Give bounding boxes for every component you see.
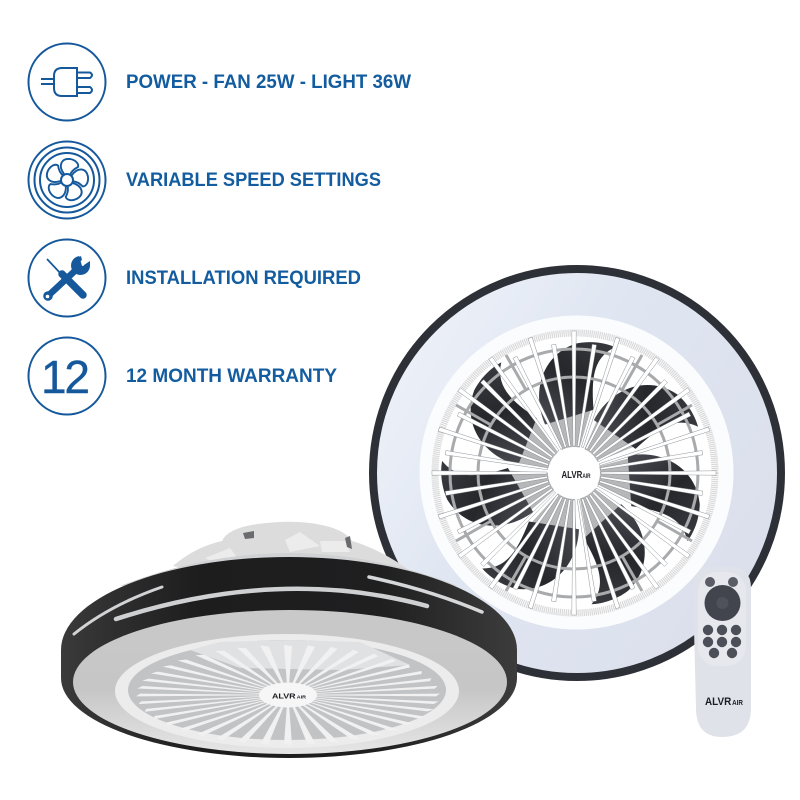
remote body (693, 567, 751, 737)
rear cage glimpses (190, 640, 410, 670)
hub with logo: ALVR AIR (272, 692, 307, 700)
inner recess (128, 640, 446, 740)
radial vanes (136, 645, 440, 745)
product: fan side view (61, 522, 517, 758)
label: speed: VARIABLE SPEED SETTINGS (126, 169, 381, 191)
row: speed (28, 142, 381, 218)
light slots (74, 577, 482, 634)
icon: 12 months (28, 338, 106, 414)
white bezel (420, 316, 734, 630)
icon: plug (28, 44, 106, 120)
remote control (693, 567, 751, 737)
product: fan viewed from below (373, 269, 781, 677)
icon: 12 months: 12 (41, 351, 90, 403)
outer dark ring (373, 269, 781, 677)
white inner ring (115, 634, 459, 748)
hub with logo: ALVRAIR (562, 470, 591, 481)
icon: fan (28, 142, 106, 218)
hub with logo (259, 682, 317, 708)
lower face (73, 610, 507, 754)
row: power (28, 44, 412, 120)
motor housing (120, 522, 458, 590)
row: warranty (28, 338, 337, 414)
dotted grille ring (435, 333, 715, 613)
rear cage (438, 337, 710, 609)
hub with logo (548, 447, 600, 499)
row: installation (28, 240, 361, 316)
front grille spokes (432, 331, 716, 615)
label: installation: INSTALLATION REQUIRED (126, 267, 361, 289)
power and mode buttons (705, 577, 738, 587)
directional dial (704, 585, 740, 621)
fan blades (422, 323, 714, 620)
label: power: POWER - FAN 25W - LIGHT 36W (126, 71, 412, 93)
icon: tools (28, 240, 106, 316)
label: warranty: 12 MONTH WARRANTY (126, 365, 337, 387)
button panel (698, 572, 746, 666)
black rim (61, 557, 517, 758)
lower buttons (703, 625, 741, 658)
remote logo: ALVRAIR (705, 696, 743, 708)
